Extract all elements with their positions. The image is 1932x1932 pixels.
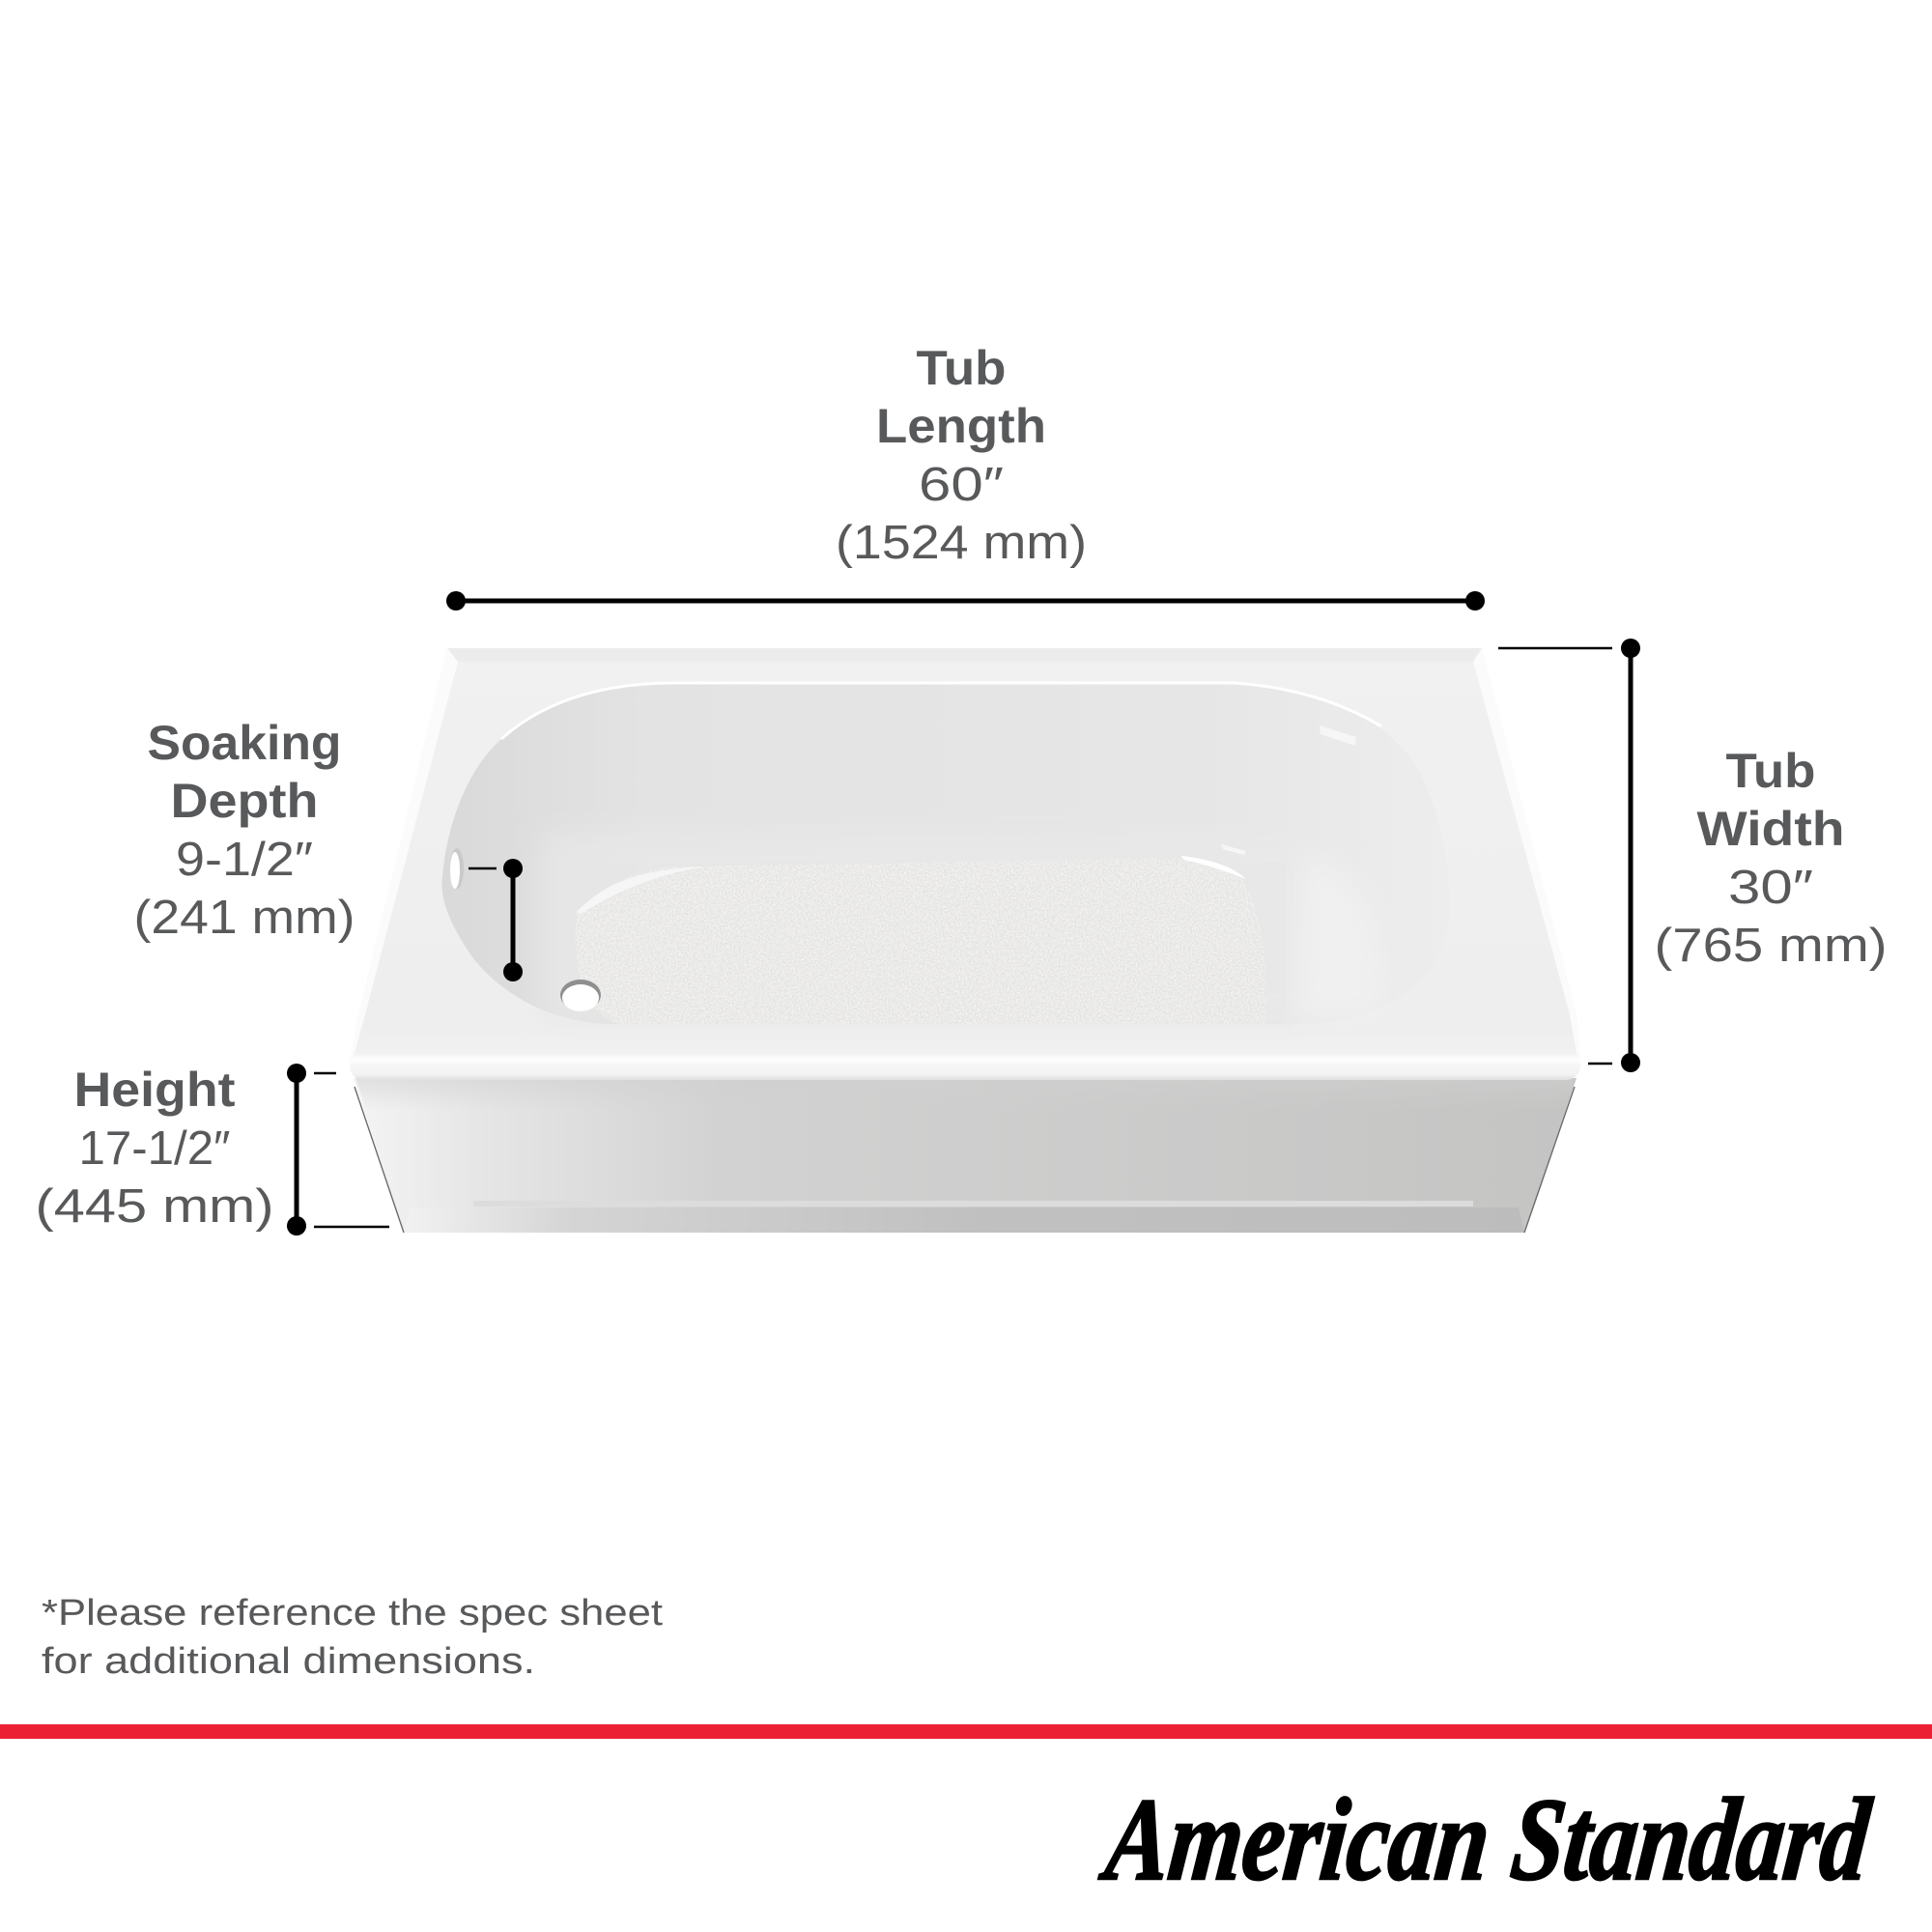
label: height: Height — [73, 1063, 236, 1117]
tub front panel — [354, 1078, 1577, 1233]
tub floor with speckle — [576, 858, 1265, 1024]
label: soaking depth: Soaking — [147, 716, 342, 770]
label: height: 17-1/2″ — [79, 1122, 230, 1175]
label: tub length: 60″ — [919, 459, 1004, 511]
tub basin — [441, 683, 1450, 1024]
label: tub width: (765 mm) — [1654, 920, 1888, 972]
red divider bar — [0, 1724, 1932, 1739]
label: height: (445 mm) — [35, 1180, 274, 1233]
label: soaking depth — [133, 716, 355, 944]
label: soaking depth: 9-1/2″ — [176, 834, 313, 886]
label: tub length: Tub — [916, 341, 1007, 395]
label: tub width: Tub — [1725, 744, 1816, 798]
drain — [560, 980, 601, 1011]
bathtub illustration — [350, 648, 1580, 1233]
label: soaking depth: (241 mm) — [133, 892, 355, 944]
label: height — [35, 1063, 274, 1233]
footnote: *Please reference the spec sheet — [42, 1593, 664, 1634]
label: tub length: Length — [876, 399, 1046, 453]
label: tub length — [836, 341, 1087, 569]
dimension line: soaking depth — [469, 859, 523, 981]
overflow hole — [450, 848, 464, 889]
tub deck — [350, 648, 1580, 1080]
dimension line: height — [287, 1064, 389, 1236]
floor and wall highlights — [577, 725, 1356, 914]
label: tub width: 30″ — [1728, 862, 1813, 914]
label: tub width — [1654, 744, 1888, 972]
label: soaking depth: Depth — [170, 774, 319, 828]
label: tub width: Width — [1696, 802, 1845, 856]
dimension line: tub length — [446, 591, 1485, 611]
footnote — [42, 1593, 664, 1682]
footnote: for additional dimensions. — [42, 1641, 535, 1682]
label: tub length: (1524 mm) — [836, 517, 1087, 569]
dimension line: tub width — [1498, 639, 1640, 1072]
